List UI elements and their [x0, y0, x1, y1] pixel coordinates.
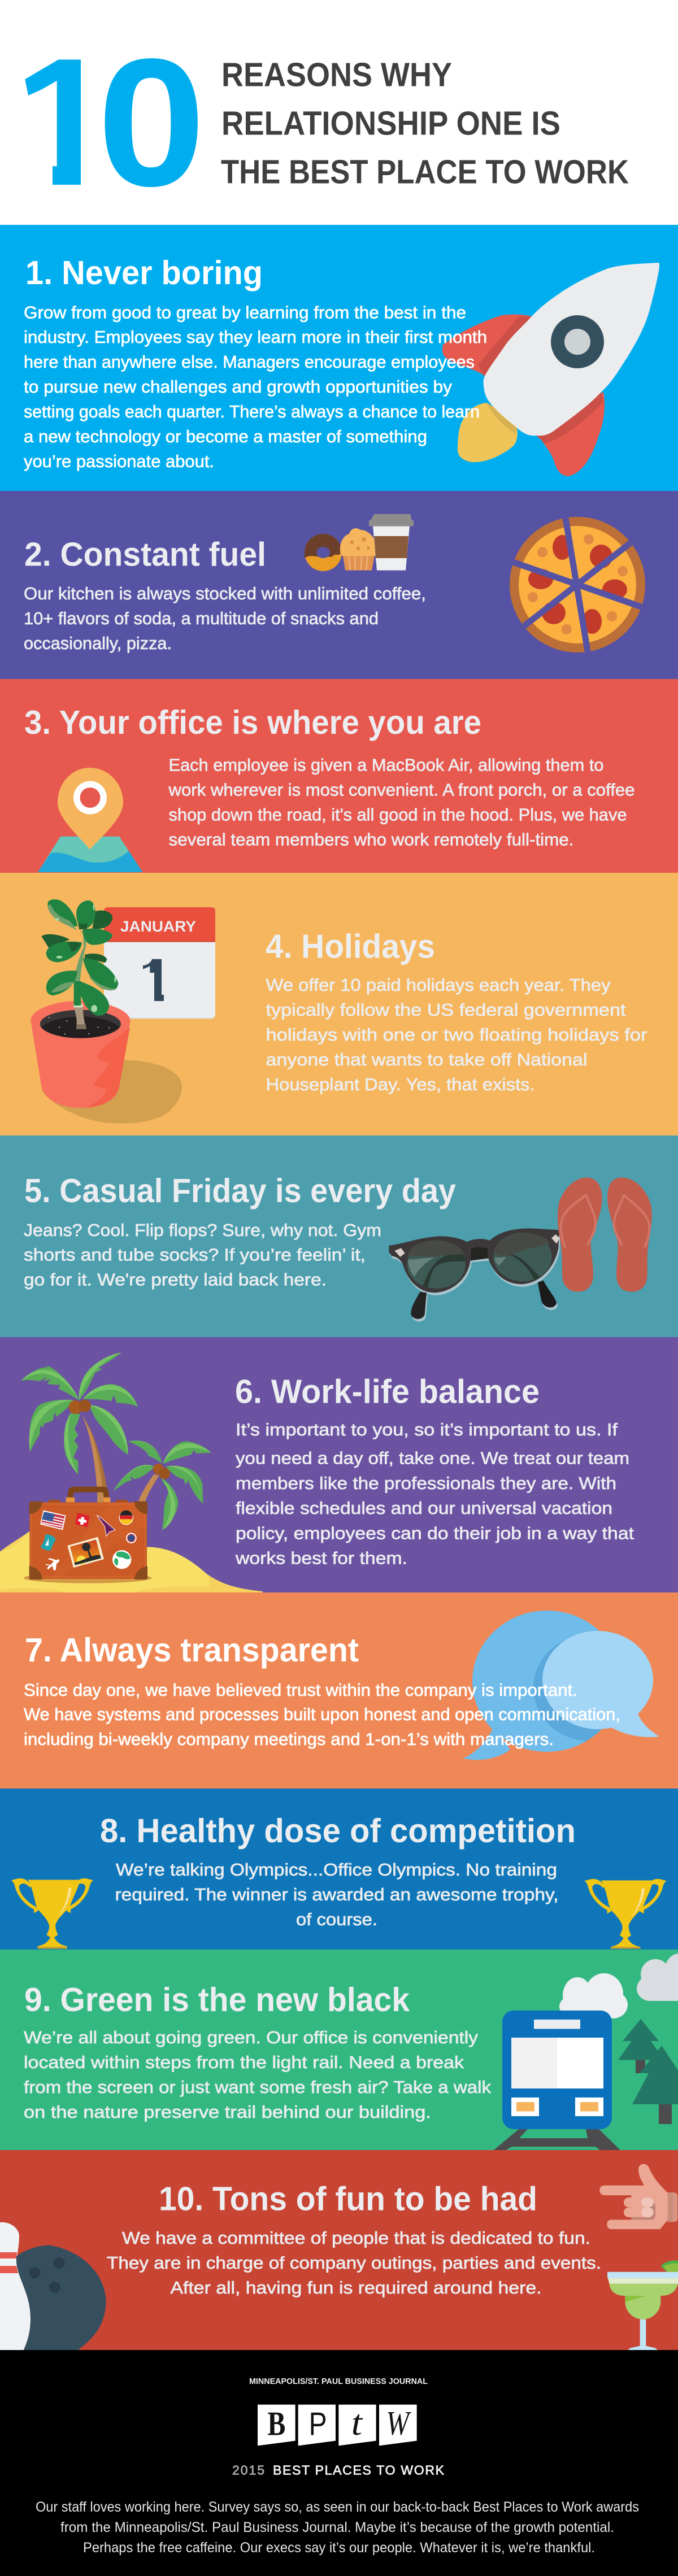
icon: speech bubbles [463, 1611, 659, 1760]
big number 10: 0 [97, 21, 206, 224]
icon: trophy right [584, 1879, 666, 1949]
icon: location pin [58, 768, 123, 850]
icon: clouds [559, 1953, 678, 2018]
text block: you’re passionate about. [24, 452, 214, 471]
heading: 6. Work-life balance [235, 1373, 540, 1410]
text block: It’s important to you, so it’s important to us. If [236, 1420, 618, 1439]
heading: 1. Never boring [25, 254, 263, 291]
text block: you need a day off, take one. We treat our team [236, 1449, 629, 1468]
text block: including bi-weekly company meetings and 1-on-1’s with managers. [24, 1730, 554, 1749]
big number 10: 1 [10, 21, 121, 224]
text block: We’re talking Olympics...Office Olympics. No training [116, 1860, 557, 1879]
big number 10 [25, 58, 198, 188]
logo: BPTW: t [351, 2403, 363, 2443]
text block: shorts and tube socks? If you’re feelin’ it, [24, 1246, 366, 1265]
heading: 7. Always transparent [25, 1631, 359, 1669]
heading: 2. Constant fuel [24, 536, 266, 573]
sticker: badge [126, 1533, 137, 1543]
text block: industry. Employees say they learn more in their first month [24, 328, 487, 347]
text block: Our kitchen is always stocked with unlimited coffee, [24, 584, 426, 603]
text block [235, 1420, 634, 1568]
heading: 4. Holidays [266, 928, 435, 965]
icon: small palm [113, 1441, 211, 1530]
icon: donut [305, 534, 342, 571]
icon: hand gesture [599, 2164, 677, 2229]
text block: After all, having fun is required around here. [171, 2278, 541, 2297]
icon: calendar [104, 907, 215, 1019]
icon: calendar: 1 [130, 946, 177, 1014]
text block [168, 755, 635, 850]
text block: Houseplant Day. Yes, that exists. [266, 1075, 534, 1094]
icon: muffin [340, 528, 380, 571]
logo: BPTW: B [267, 2405, 285, 2443]
text block: flexible schedules and our universal vacation [236, 1499, 612, 1518]
heading: 9. Green is the new black [24, 1981, 410, 2018]
text block: works best for them. [235, 1548, 407, 1568]
text block [24, 1681, 620, 1749]
text block [107, 2229, 601, 2297]
panel: 6 work-life balance [0, 1337, 678, 1592]
text block [24, 303, 487, 471]
title: THE BEST PLACE TO WORK [221, 154, 629, 191]
award line: 2015 [232, 2463, 264, 2478]
header [25, 58, 628, 188]
icon: big palm [21, 1352, 138, 1503]
text block: located within steps from the light rail. Need a break [24, 2053, 464, 2072]
text block [266, 976, 647, 1094]
text block: anyone that wants to take off National [266, 1050, 588, 1069]
text block: policy, employees can do their job in a way that [236, 1524, 634, 1543]
icon: train [494, 2011, 620, 2150]
text block: to pursue new challenges and growth opportunities by [24, 377, 453, 397]
icon: bowling ball [16, 2245, 106, 2350]
text block: on the nature preserve trail behind our building. [24, 2103, 431, 2122]
text block: work wherever is most convenient. A front porch, or a coffee [168, 781, 635, 800]
icon: bowling pin [0, 2222, 31, 2350]
title: RELATIONSHIP ONE IS [221, 105, 560, 142]
text block: here than anywhere else. Managers encourage employees [24, 353, 475, 372]
text block: Each employee is given a MacBook Air, allowing them to [168, 755, 603, 774]
text block: of course. [296, 1910, 377, 1929]
sticker: airplane [45, 1558, 59, 1570]
icon: calendar: JANUARY [120, 918, 196, 935]
text block: members like the professionals they are. With [236, 1474, 616, 1493]
closing text: Our staff loves working here. Survey says so, as seen in our back-to-back Best Places to Work awards [36, 2499, 639, 2515]
icon: trophy left [11, 1878, 93, 1949]
logo: BPTW: W [386, 2404, 411, 2442]
icon: map [38, 837, 142, 872]
text block: setting goals each quarter. There’s always a chance to learn [24, 402, 480, 421]
icon: potted plant [31, 899, 182, 1124]
closing text: Perhaps the free caffeine. Our execs say it’s our people. Whatever it is, we’re thankful. [83, 2540, 595, 2556]
sticker: american flag [40, 1510, 66, 1530]
text block: 10+ flavors of soda, a multitude of snacks and [24, 609, 379, 628]
text block: typically follow the US federal government [266, 1000, 626, 1020]
icon: suitcase [24, 1487, 151, 1583]
sticker: swiss [75, 1513, 89, 1527]
sticker: germany [119, 1511, 133, 1525]
panel: 3 your office is where you are [0, 679, 678, 873]
text block [24, 2028, 492, 2122]
text block: We’re all about going green. Our office is conveniently [24, 2028, 479, 2047]
title [221, 56, 629, 191]
closing text [36, 2499, 639, 2556]
panel: 7 always transparent [0, 1592, 678, 1789]
closing text: from the Minneapolis/St. Paul Business Journal. Maybe it’s because of the growth potential. [60, 2520, 614, 2535]
panel: footer [0, 2350, 678, 2576]
text block: occasionally, pizza. [24, 634, 172, 653]
text block: We have a committee of people that is dedicated to fun. [122, 2229, 590, 2248]
text block: Since day one, we have believed trust within the company is important. [24, 1681, 577, 1700]
text block: We have systems and processes built upon honest and open communication, [24, 1705, 620, 1724]
text block: They are in charge of company outings, parties and events. [107, 2253, 601, 2273]
text block: required. The winner is awarded an awesome trophy, [115, 1885, 558, 1904]
sticker: photo [67, 1537, 104, 1568]
heading: 8. Healthy dose of competition [100, 1812, 576, 1850]
icon: beach with palm trees and suitcase [0, 1352, 263, 1592]
icon: trees [618, 2019, 678, 2124]
heading: 3. Your office is where you are [24, 704, 481, 741]
icon: rocket [442, 263, 659, 476]
panel: 8 healthy dose of competition [0, 1789, 678, 1950]
panel: 2 constant fuel [0, 491, 678, 679]
panel: 4 holidays [0, 873, 678, 1135]
sticker: globe [112, 1550, 131, 1569]
icon: pizza [510, 511, 645, 658]
text block: Grow from good to great by learning from the best in the [24, 303, 466, 322]
heading: 10. Tons of fun to be had [159, 2181, 537, 2218]
heading: 5. Casual Friday is every day [24, 1172, 456, 1209]
panel: 9 green is the new black [0, 1950, 678, 2150]
icon: sunglasses [389, 1229, 560, 1321]
sticker: sailboat [41, 1534, 56, 1551]
text block: several team members who work remotely full-time. [168, 830, 574, 850]
panel: 1 never boring [0, 225, 678, 491]
award line: BEST PLACES TO WORK [273, 2463, 445, 2478]
text block: Jeans? Cool. Flip flops? Sure, why not. Gym [24, 1221, 381, 1240]
text block [24, 1221, 381, 1289]
title: REASONS WHY [221, 56, 452, 94]
logo: BPTW: P [309, 2407, 327, 2443]
text block: from the screen or just want some fresh air? Take a walk [24, 2078, 492, 2097]
panel: 10 tons of fun to be had [0, 2150, 678, 2350]
text block: a new technology or become a master of something [24, 427, 427, 446]
text block: holidays with one or two floating holidays for [266, 1025, 647, 1045]
panel: 5 casual friday [0, 1135, 678, 1337]
text block [115, 1860, 558, 1929]
icon: margarita glass [607, 2260, 678, 2350]
icon: flip flops [558, 1177, 652, 1292]
text block: go for it. We're pretty laid back here. [24, 1270, 327, 1289]
logo: BPTW [258, 2403, 417, 2446]
icon: coffee cup [369, 514, 414, 571]
text block: We offer 10 paid holidays each year. They [266, 976, 611, 995]
publication name: MINNEAPOLIS/ST. PAUL BUSINESS JOURNAL [249, 2377, 428, 2386]
text block: shop down the road, it's all good in the hood. Plus, we have [168, 805, 627, 824]
text block [24, 584, 426, 653]
sticker: eiffel tower [97, 1516, 115, 1536]
